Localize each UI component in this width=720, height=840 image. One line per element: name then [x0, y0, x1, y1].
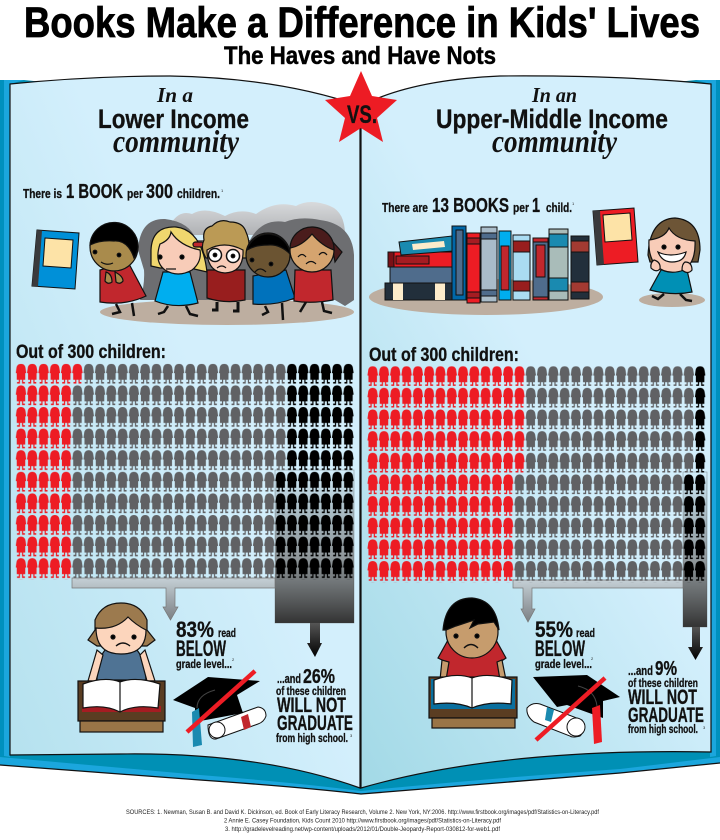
- heading: upper-middle income: Upper-Middle Income: [436, 104, 668, 134]
- heading: lower income: Lower Income: [98, 104, 249, 134]
- text: 83% read below grade level: 2: [232, 657, 235, 662]
- text: 1 book per 300 children: 1: [221, 188, 224, 193]
- arrow: upper income graduate block: [683, 472, 707, 660]
- label: out of 300 children left: Out of 300 children:: [16, 342, 166, 363]
- upright books: [452, 226, 589, 303]
- text: 13 books per 1 child: 13 BOOKS: [432, 195, 509, 217]
- text: 13 books per 1 child: There are: [382, 200, 428, 215]
- star: versus: [325, 71, 397, 142]
- text: 13 books per 1 child: child.: [546, 200, 572, 215]
- text: 1 book per 300 children: 1 BOOK: [66, 181, 123, 203]
- text: 1 book per 300 children: [23, 181, 224, 203]
- icon: crossed-out graduation cap left: [173, 671, 266, 747]
- text: 13 books per 1 child: 1: [532, 195, 540, 217]
- text: 55% read below grade level: 2: [591, 656, 594, 661]
- child 5: [290, 227, 342, 313]
- text: 13 books per 1 child: per: [513, 200, 529, 215]
- heading: upper-middle income: [436, 83, 668, 159]
- text: 26% will not graduate: 3: [350, 733, 353, 738]
- text: 26% will not graduate: WILL NOT: [277, 694, 346, 717]
- text: 83% read below grade level: BELOW: [176, 636, 226, 661]
- shadow crowd: [138, 202, 354, 306]
- text: 1 book per 300 children: per: [127, 186, 143, 201]
- heading: lower income: [98, 83, 249, 159]
- ground shadow: [369, 279, 603, 315]
- arrow: lower income reading bracket: [72, 578, 275, 620]
- left page: [10, 76, 360, 788]
- horizontal books: [385, 236, 454, 300]
- arrow: lower income graduate block: [275, 470, 354, 657]
- text: 83% read below grade level: read: [218, 626, 236, 640]
- text: 26% will not graduate: ...and: [277, 671, 301, 686]
- text: 13 books per 1 child: 1: [572, 201, 575, 206]
- text: 83% read below grade level: [176, 617, 236, 671]
- star: versus: VS.: [347, 101, 377, 129]
- icon: single blue book: [32, 230, 79, 289]
- illustration: sad girl reading: [78, 603, 165, 732]
- sources: [126, 809, 599, 833]
- arrow: upper income reading bracket: [513, 580, 683, 622]
- illustration: stack of books: [369, 226, 603, 315]
- text: 1 book per 300 children: There is: [23, 186, 62, 201]
- heading: upper-middle income: community: [492, 123, 618, 159]
- text: 26% will not graduate: [276, 666, 353, 745]
- child 2: [151, 227, 207, 316]
- text: 26% will not graduate: from high school.: [276, 731, 348, 745]
- chart: 300 children lower income: [15, 364, 354, 580]
- text: 9% will not graduate: ...and: [628, 663, 653, 678]
- right page: [361, 76, 711, 788]
- text: 55% read below grade level: grade level...: [535, 657, 592, 671]
- text: 26% will not graduate: of these children: [276, 684, 346, 698]
- text: 9% will not graduate: 9%: [655, 658, 677, 680]
- heading: upper-middle income: In an: [531, 83, 577, 107]
- text: 83% read below grade level: 83%: [176, 617, 214, 642]
- icon: red book: [593, 208, 638, 265]
- heading: lower income: In a: [156, 83, 193, 107]
- illustration: happy child: [639, 218, 705, 307]
- text: 1 book per 300 children: 300: [146, 181, 173, 203]
- sources: SOURCES: 1. Newman, Susan B. and David K. Dickinson, ed. Book of Early Literacy Research, Volume 2. New York, NY:2006. http://www.firstbook.org/images/pdf/Statistics-on-Literacy.pdf: [126, 809, 599, 816]
- ground shadow: [100, 299, 354, 325]
- sources: 2 Annie E. Casey Foundation, Kids Count 2010 http://www.firstbook.org/images/pdf/Statistics-on-Literacy.pdf: [224, 818, 501, 824]
- subtitle: The Haves and Have Nots: [224, 42, 496, 70]
- text: 9% will not graduate: 3: [703, 725, 706, 730]
- child 1: [90, 222, 146, 316]
- text: 13 books per 1 child: [382, 195, 575, 217]
- text: 26% will not graduate: 26%: [303, 666, 335, 688]
- text: 55% read below grade level: [535, 617, 595, 671]
- icon: crossed-out graduation cap right: [527, 675, 620, 744]
- chart: 300 children upper-middle income: [367, 366, 706, 583]
- text: 55% read below grade level: BELOW: [535, 636, 585, 661]
- text: 83% read below grade level: grade level...: [176, 657, 232, 671]
- illustration: group of children: [90, 202, 354, 325]
- heading: lower income: community: [113, 123, 240, 159]
- label: out of 300 children right: Out of 300 children:: [369, 345, 519, 366]
- child 4: [246, 233, 295, 320]
- text: 26% will not graduate: GRADUATE: [277, 712, 353, 735]
- illustration: sad boy reading: [429, 598, 517, 728]
- sources: 3. http://gradelevelreading.net/wp-content/uploads/2012/01/Double-Jeopardy-Report-030812-for-web1.pdf: [225, 826, 500, 833]
- text: 55% read below grade level: read: [576, 626, 595, 640]
- text: 1 book per 300 children: children.: [177, 186, 220, 201]
- text: 55% read below grade level: 55%: [535, 617, 573, 642]
- text: 9% will not graduate: [628, 658, 706, 736]
- child 3: [202, 221, 249, 311]
